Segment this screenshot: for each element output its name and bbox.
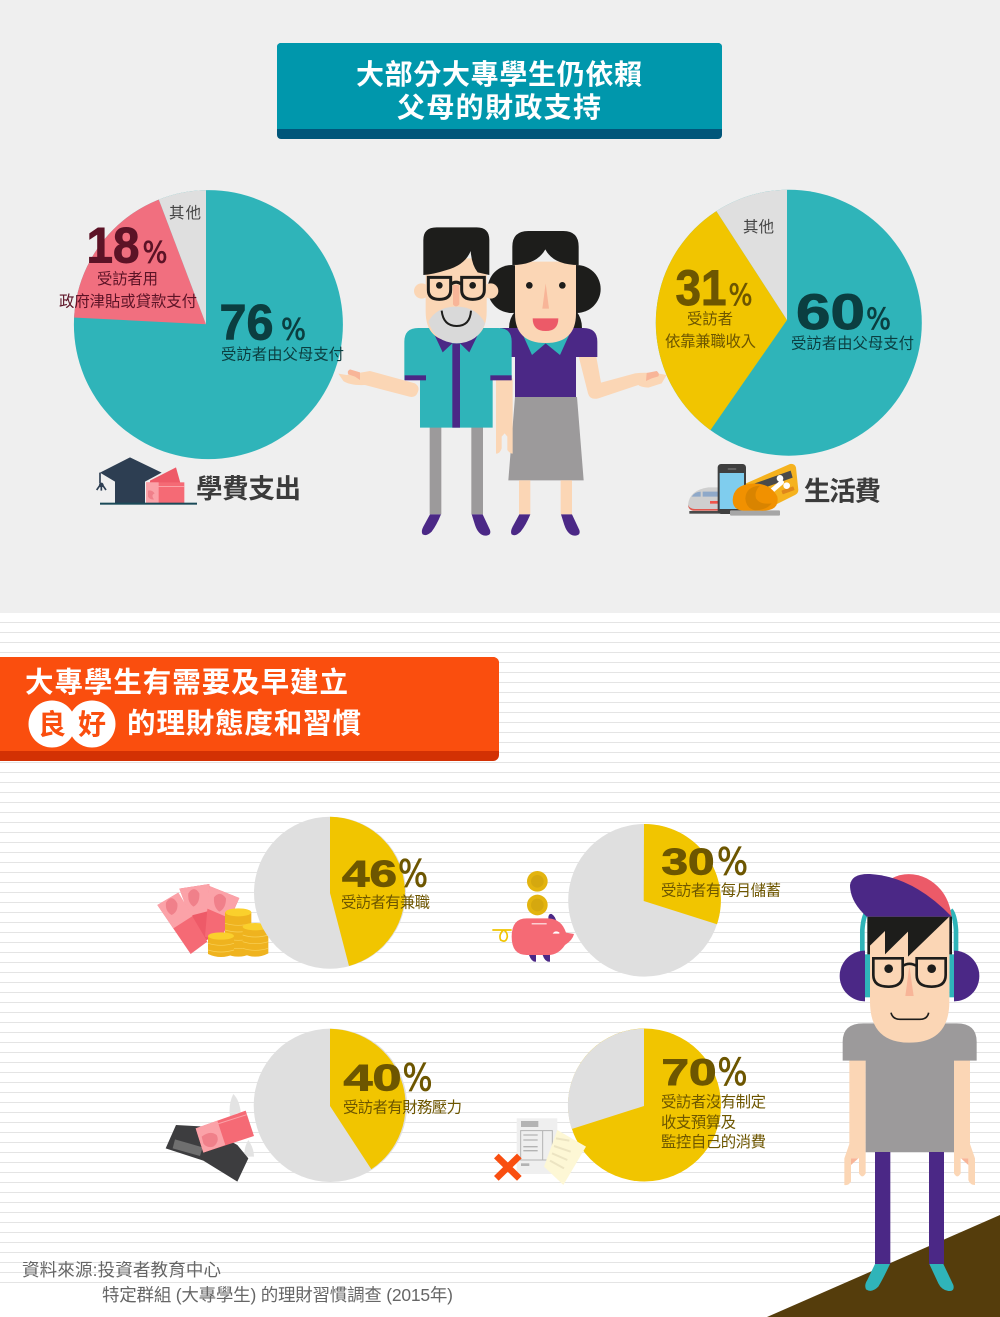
icon: wallet and banknote xyxy=(166,1094,254,1182)
pie chart: monthly savings 30%: % xyxy=(717,840,748,883)
pie chart: living expenses: 受訪者由父母支付 xyxy=(791,334,914,352)
pie chart: tuition xyxy=(60,190,344,460)
title banner: 父母的財政支持 xyxy=(397,92,601,123)
pie chart: living expenses: 其他 xyxy=(743,218,774,236)
pie chart: monthly savings 30%: 受訪者有每月儲蓄 xyxy=(661,882,781,900)
pie chart: financial pressure 40%: % xyxy=(402,1057,432,1100)
source note: 資料來源:投資者教育中心 xyxy=(22,1260,221,1280)
pie chart: part-time job 46%: 受訪者有兼職 xyxy=(341,894,430,912)
title banner xyxy=(277,43,722,139)
section banner: good money habits: 好 xyxy=(78,709,106,740)
pie chart: no budget 70%: 監控自己的消費 xyxy=(661,1133,766,1151)
pie chart: no budget 70%: 受訪者沒有制定 xyxy=(661,1093,766,1111)
pie chart: living expenses: 60 xyxy=(796,284,865,340)
pie chart: no budget 70% xyxy=(568,1028,766,1182)
heading: living expenses: 生活費 xyxy=(804,476,881,506)
illustration: parents xyxy=(338,227,667,536)
pie chart: tuition: 政府津貼或貸款支付 xyxy=(59,292,197,310)
source note: 特定群組 (大專學生) 的理財習慣調查 (2015年) xyxy=(102,1285,453,1305)
pie chart: tuition: 18 xyxy=(86,217,140,273)
pie chart: part-time job 46%: % xyxy=(398,853,428,896)
heading: tuition: 學費支出 xyxy=(196,474,301,504)
icon: receipts and cross xyxy=(496,1118,586,1185)
pie chart: living expenses: % xyxy=(728,278,752,312)
pie chart: financial pressure 40% xyxy=(254,1029,462,1182)
pie chart: financial pressure 40%: 受訪者有財務壓力 xyxy=(343,1098,462,1116)
pie chart: living expenses: 31 xyxy=(676,260,726,316)
pie chart: tuition: 受訪者由父母支付 xyxy=(221,346,344,364)
pie chart: financial pressure 40%: 40 xyxy=(344,1057,402,1099)
pie chart: tuition: % xyxy=(281,312,306,346)
pie chart: monthly savings 30% xyxy=(568,824,781,977)
pie chart: part-time job 46%: 46 xyxy=(342,853,397,895)
pie chart: living expenses: 受訪者 xyxy=(687,310,733,328)
illustration: student with headphones xyxy=(840,874,979,1291)
section banner: good money habits xyxy=(0,657,499,761)
pie chart: tuition: 76 xyxy=(220,294,274,350)
pie chart: living expenses: 依靠兼職收入 xyxy=(665,332,756,350)
pie chart: tuition: 其他 xyxy=(169,204,201,222)
pie chart: no budget 70%: 70 xyxy=(662,1051,716,1093)
woman xyxy=(488,231,667,536)
icon: piggy bank xyxy=(492,871,574,962)
pie chart: part-time job 46% xyxy=(254,817,430,969)
pie chart: living expenses xyxy=(656,190,922,456)
pie chart: monthly savings 30%: 30 xyxy=(662,840,714,882)
icon: banknotes and coins xyxy=(157,884,268,957)
pie chart: tuition: % xyxy=(142,235,168,269)
title banner: 大部分大專學生仍依賴 xyxy=(356,59,642,90)
icon: train, phone, card and chicken xyxy=(688,464,798,516)
pie chart: no budget 70%: 收支預算及 xyxy=(661,1114,736,1132)
pie chart: no budget 70%: % xyxy=(718,1051,748,1094)
pie chart: living expenses: % xyxy=(866,302,891,336)
section banner: good money habits: 的理財態度和習慣 xyxy=(127,708,361,740)
ground wedge xyxy=(767,1215,1000,1317)
section banner: good money habits: 良 xyxy=(38,709,66,740)
icon: graduation cap and money xyxy=(97,457,197,505)
man xyxy=(338,227,513,536)
section banner: good money habits: 大專學生有需要及早建立 xyxy=(25,667,348,699)
source note xyxy=(22,1260,453,1305)
pie chart: tuition: 受訪者用 xyxy=(97,270,158,288)
